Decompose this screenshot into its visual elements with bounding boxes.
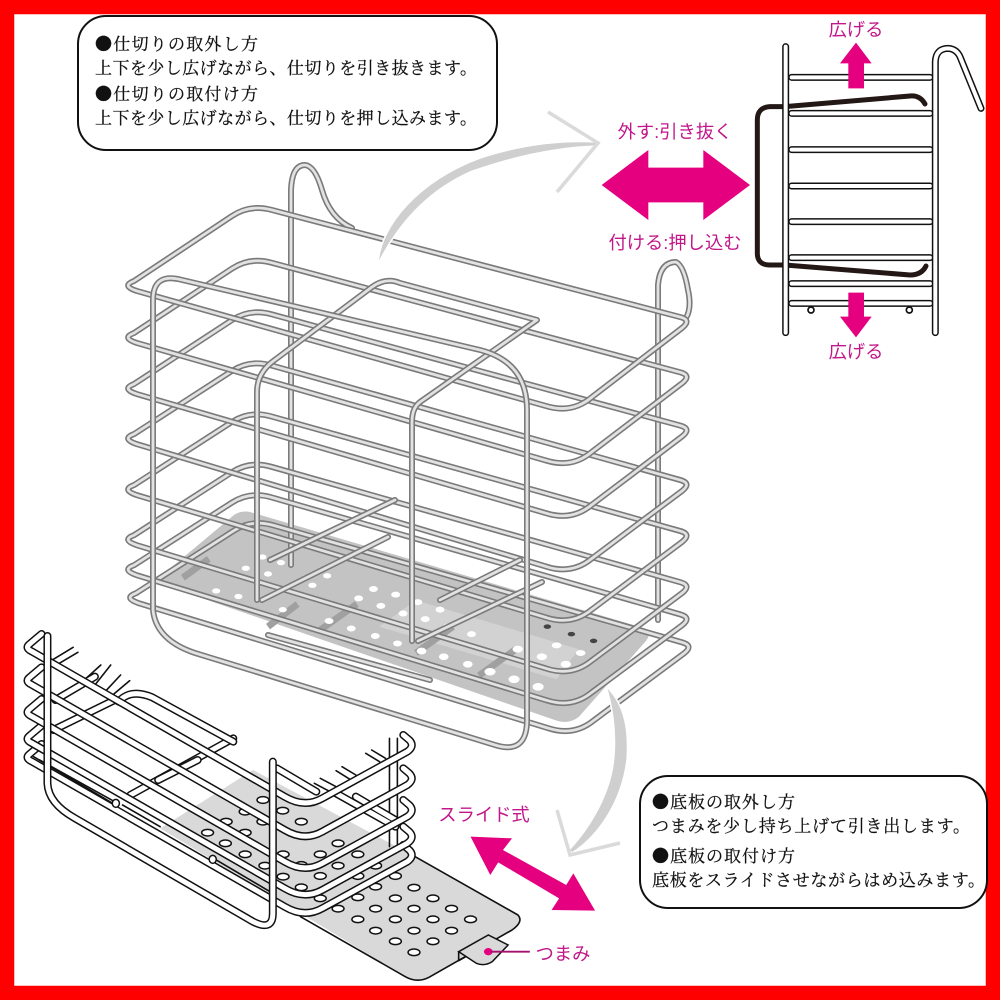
side view diagram of divider xyxy=(602,43,981,337)
back hanging posts with hooks xyxy=(291,165,690,620)
black divider outline xyxy=(757,96,926,275)
label: tab: つまみ xyxy=(536,943,590,964)
right post with hook xyxy=(935,48,981,333)
back tubes xyxy=(53,677,395,827)
label: spread top: 広げる xyxy=(829,19,883,40)
tab marker line xyxy=(490,951,530,953)
callout: base plate instructions xyxy=(640,776,987,908)
base plate xyxy=(160,770,520,980)
label: spread bottom: 広げる xyxy=(829,341,883,362)
callout: base plate instructions: ●底板の取付け方 xyxy=(652,842,795,867)
left post xyxy=(782,47,789,333)
tab marker dot xyxy=(484,948,493,955)
label: remove: 外す:引き抜く xyxy=(618,121,732,142)
callout: base plate instructions: ●底板の取外し方 xyxy=(652,788,795,813)
horizontal ring tubes xyxy=(792,77,930,303)
callout: divider instructions: ●仕切りの取外し方 xyxy=(95,30,258,55)
bottom slide rail with stoppers xyxy=(34,757,273,893)
pink arrow up xyxy=(840,43,872,88)
plate tab xyxy=(459,935,508,965)
plate holes xyxy=(202,797,476,956)
callout: divider instructions xyxy=(78,16,497,150)
bottom cross rods xyxy=(262,500,542,680)
gray curved arrow to the base plate diagram xyxy=(557,686,628,855)
line drawing of basket with base plate sliding out xyxy=(27,634,595,980)
callout: divider instructions: ●仕切りの取付け方 xyxy=(95,80,258,105)
label: slide type: スライド式 xyxy=(438,804,530,825)
front divider frame xyxy=(153,278,527,747)
pink double arrow left right xyxy=(602,150,750,220)
pink slide double arrow xyxy=(471,837,595,911)
foot circles xyxy=(808,307,912,313)
gray curved arrow to the divider diagram xyxy=(378,112,598,264)
callout: divider instructions: 上下を少し広げながら、仕切りを引き抜きます。 xyxy=(95,58,477,78)
sliding divider inner wire xyxy=(257,281,537,641)
base plate of the basket xyxy=(161,511,649,722)
pink arrow down xyxy=(840,293,872,337)
stacked rings xyxy=(27,634,412,913)
back hatch wires xyxy=(53,647,397,847)
callout: base plate instructions: つまみを少し持ち上げて引き出します。 xyxy=(652,817,970,836)
callout: base plate instructions: 底板をスライドさせながらはめ込みます。 xyxy=(652,871,985,890)
label: attach: 付ける:押し込む xyxy=(608,232,742,253)
callout: divider instructions: 上下を少し広げながら、仕切りを押し込みます。 xyxy=(95,108,477,128)
wire basket body xyxy=(128,165,690,747)
stacked wire rings xyxy=(128,208,689,734)
front divider frame xyxy=(47,636,273,925)
